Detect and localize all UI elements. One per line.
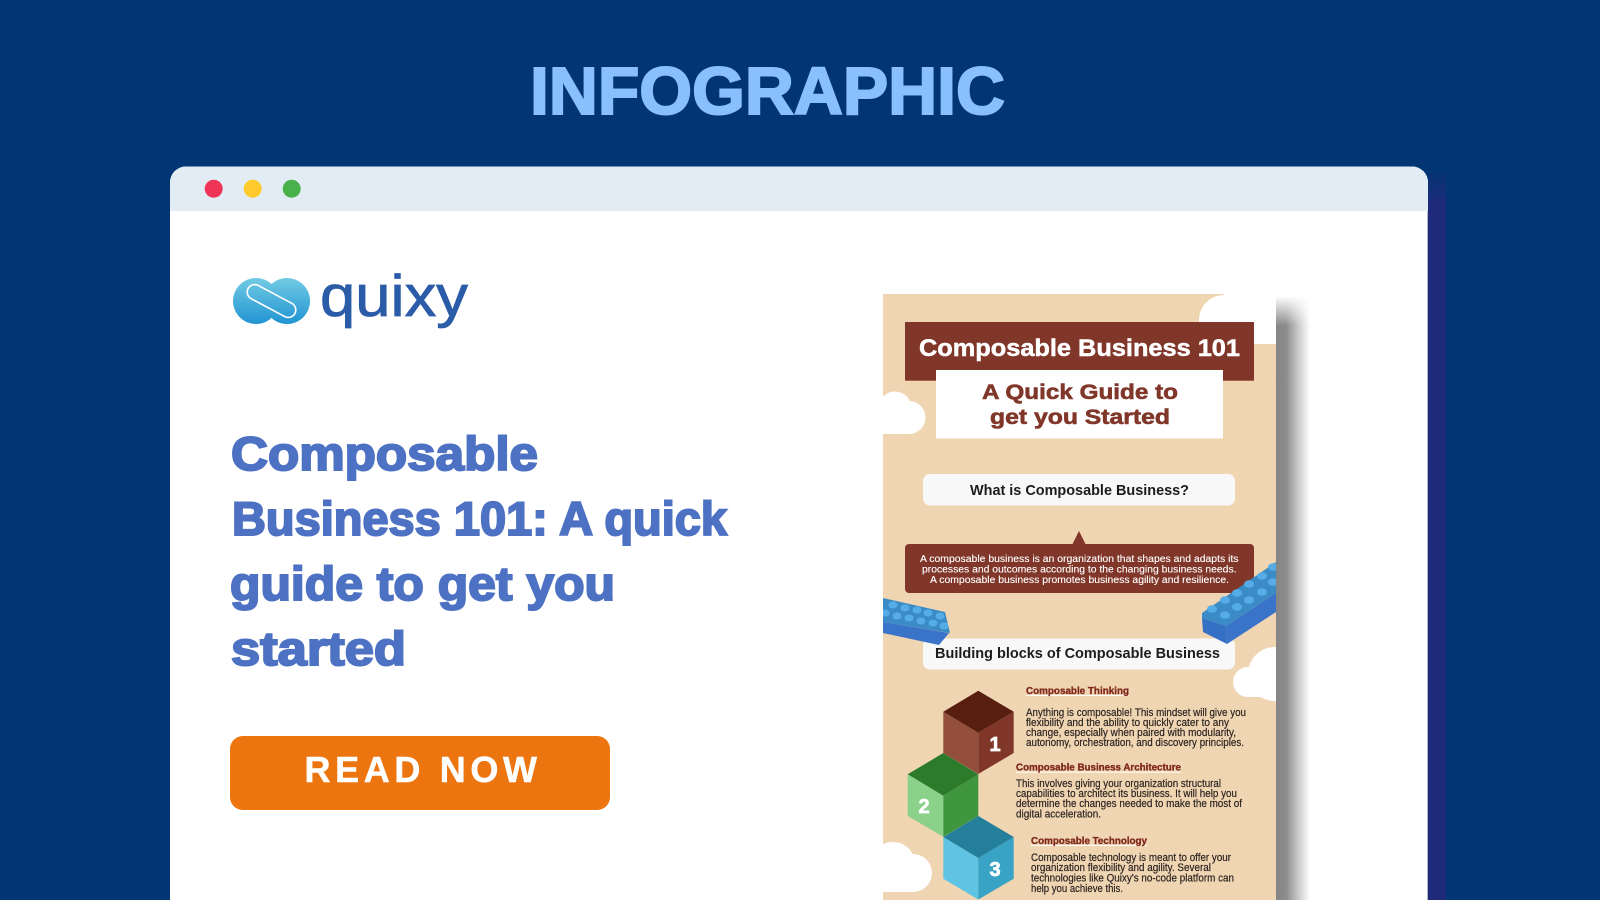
browser window (170, 166, 1446, 900)
subtitle box: A Quick Guide to (982, 380, 1178, 404)
text block: composable thinking: Anything is composable! This mindset will give you (1026, 707, 1246, 719)
text block: composable technology: organization flexibility and agility. Several (1031, 862, 1211, 874)
window control: red (205, 180, 223, 198)
text block: composable thinking: autonomy, orchestration, and discovery principles. (1026, 737, 1244, 749)
cloud: bottom left (883, 842, 932, 892)
text block: composable business architecture: Composable Business Architecture (1016, 763, 1181, 774)
text block: composable technology: help you achieve this. (1031, 883, 1123, 895)
icon: cube 2 (908, 753, 978, 837)
text block: composable technology (1031, 836, 1234, 895)
pill: building blocks (923, 638, 1235, 670)
title banner: Composable Business 101 (919, 335, 1240, 362)
text block: composable business architecture (1016, 763, 1242, 820)
icon: cube 1: 1 (989, 734, 1001, 756)
title: INFOGRAPHIC (530, 54, 1005, 129)
icon: lego brick right (1202, 562, 1278, 644)
cloud: right (1233, 647, 1276, 701)
text block: composable thinking: change, especially when paired with modularity, (1026, 727, 1236, 739)
subtitle box: get you Started (990, 405, 1170, 429)
callout: definition: A composable business is an organization that shapes and adapts its (920, 553, 1238, 565)
text block: composable business architecture: digital acceleration. (1016, 808, 1101, 820)
text block: composable business architecture: determine the changes needed to make the most of (1016, 798, 1242, 810)
icon: cube 3: 3 (989, 859, 1001, 881)
icon: lego brick left (880, 598, 950, 645)
logo: quixy (233, 264, 468, 329)
infographic preview shadow (1276, 296, 1310, 900)
text block: composable business architecture: capabilities to architect its business. It will help you (1016, 788, 1237, 800)
cloud: left (878, 392, 926, 434)
text block: composable business architecture: This involves giving your organization structural (1016, 778, 1221, 790)
heading: Business 101: A quick (232, 492, 728, 545)
button: read now (230, 736, 610, 810)
heading: started (231, 622, 406, 675)
text block: composable thinking: flexibility and the ability to quickly cater to any (1026, 717, 1230, 729)
pill: what is composable business: What is Composable Business? (970, 482, 1189, 499)
window control: green (283, 180, 301, 198)
title banner (905, 322, 1254, 381)
window control: yellow (244, 180, 262, 198)
icon: cube 2: 2 (918, 796, 930, 818)
subtitle box (936, 370, 1223, 438)
text block: composable thinking (1026, 686, 1246, 749)
logo wordmark: quixy (320, 264, 468, 329)
button: read now: READ NOW (304, 749, 537, 790)
callout: definition (905, 531, 1254, 593)
callout: definition: A composable business promotes business agility and resilience. (930, 574, 1229, 586)
pill: building blocks: Building blocks of Composable Business (935, 645, 1220, 662)
heading (230, 427, 728, 675)
heading: guide to get you (230, 557, 615, 610)
text block: composable technology: Composable technology is meant to offer your (1031, 852, 1231, 864)
pill: what is composable business (923, 474, 1235, 506)
text block: composable technology: technologies like Quixy's no-code platform can (1031, 872, 1234, 884)
browser title bar (170, 166, 1428, 211)
panel: infographic preview (871, 294, 1302, 900)
callout: definition: processes and outcomes according to the changing business needs. (922, 564, 1236, 576)
text block: composable thinking: Composable Thinking (1026, 686, 1129, 697)
heading: Composable (231, 427, 538, 480)
icon: cube 1 (943, 691, 1014, 774)
cloud: top right (1199, 294, 1276, 345)
icon: cube 3 (943, 816, 1014, 900)
text block: composable technology: Composable Technology (1031, 836, 1147, 847)
icon: logo mark (233, 278, 310, 324)
